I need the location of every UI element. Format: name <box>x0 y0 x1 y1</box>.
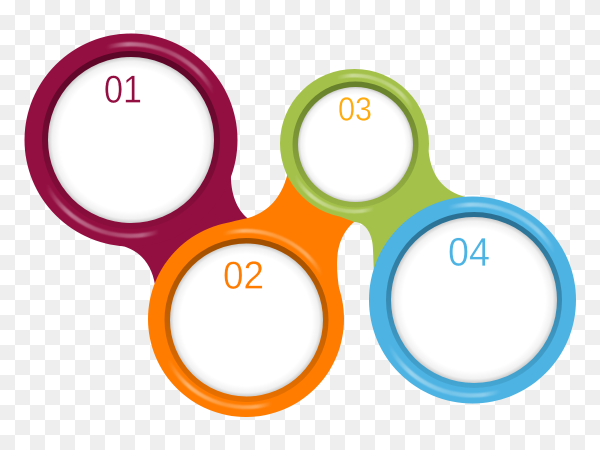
orange ring tail <box>205 172 360 340</box>
orange white centre <box>170 244 323 396</box>
orange highlights <box>168 231 322 407</box>
step 02: orange ring <box>148 172 360 417</box>
orange body disc <box>148 221 344 417</box>
number 01: 01 <box>104 68 142 112</box>
blue white centre <box>391 217 557 383</box>
blue highlights <box>388 205 555 395</box>
orange dark inner ring <box>164 238 328 402</box>
blue body disc <box>369 196 576 404</box>
number 03: 03 <box>338 90 372 128</box>
green dark inner ring <box>292 82 418 208</box>
purple highlights <box>46 44 214 236</box>
step 03: green ring <box>280 69 470 275</box>
purple white centre <box>48 57 214 223</box>
number 02: 02 <box>223 254 264 298</box>
green body disc <box>280 69 429 218</box>
purple body disc <box>24 34 238 246</box>
green white centre <box>298 87 413 202</box>
purple ring tail <box>122 140 250 295</box>
purple dark inner ring <box>42 51 220 229</box>
step 04: blue ring <box>369 196 576 404</box>
green ring tail <box>340 140 470 275</box>
blue dark inner ring <box>386 212 562 388</box>
number 04: 04 <box>448 230 490 274</box>
green highlights <box>294 76 413 211</box>
step 01: purple ring <box>24 34 250 295</box>
